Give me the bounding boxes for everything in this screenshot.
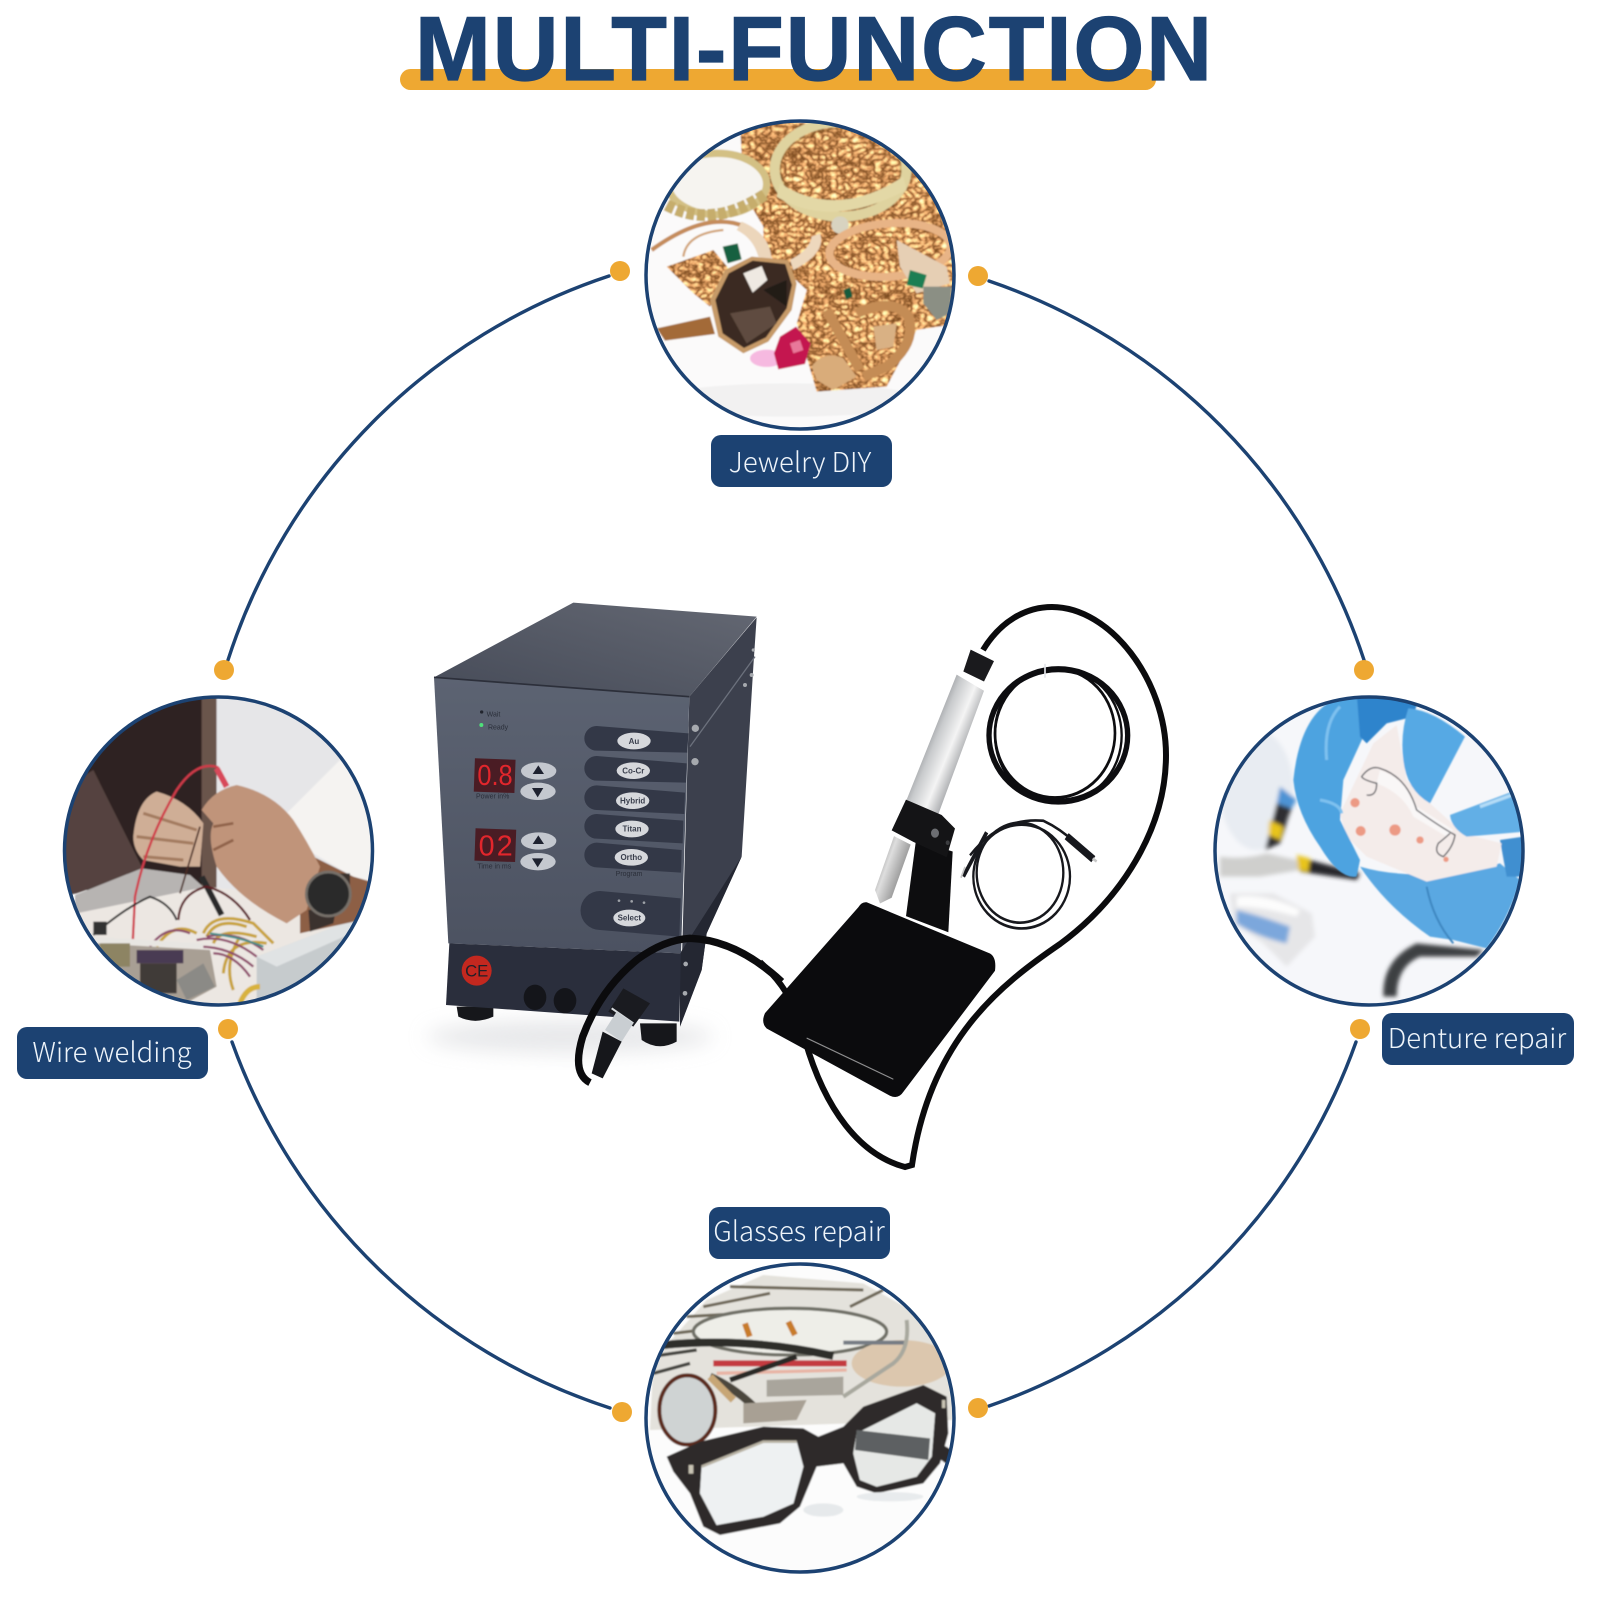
desk	[79, 886, 338, 1004]
panel: wire welding photo	[60, 690, 380, 1010]
forearm	[299, 857, 368, 934]
upper left glove	[1293, 693, 1367, 877]
pile of frames	[650, 1275, 953, 1430]
shirt	[288, 760, 370, 880]
select button: Select	[618, 914, 641, 923]
title underline	[400, 69, 1156, 90]
spot welder control box	[427, 603, 782, 1083]
power buttons	[520, 762, 556, 800]
status LEDs	[479, 710, 509, 731]
handpiece cable	[760, 607, 1166, 1167]
cable grip	[963, 650, 994, 682]
laptop	[60, 770, 143, 897]
program buttons: Ortho	[620, 853, 642, 862]
panel: denture photo	[1210, 690, 1530, 1010]
white strip	[130, 938, 204, 949]
time display: 02	[479, 830, 513, 862]
right side face	[680, 617, 757, 1027]
knobs	[524, 985, 576, 1013]
alligator test lead	[961, 820, 1097, 928]
program buttons: Hybrid	[620, 796, 645, 805]
power display	[474, 758, 516, 800]
top glove	[1357, 698, 1418, 744]
connector dots	[214, 261, 1374, 1422]
program buttons: Program	[616, 871, 643, 878]
cable coil	[989, 664, 1128, 803]
power display: 0.8	[477, 760, 513, 792]
pen tip	[875, 836, 911, 903]
grey case	[256, 936, 344, 998]
plaster	[1340, 725, 1502, 882]
thumb	[1450, 790, 1525, 837]
label: Wire welding: Wire welding	[32, 1030, 192, 1070]
pen barrel	[907, 675, 984, 817]
label: Wire welding	[17, 1027, 208, 1079]
program buttons: Titan	[623, 825, 642, 834]
probe and wires	[202, 877, 222, 915]
time display: Time in ms	[477, 863, 512, 870]
program buttons	[584, 726, 688, 878]
right oval ring	[828, 219, 952, 281]
panel: glasses photo	[650, 1274, 952, 1536]
red wire	[133, 766, 218, 943]
dark frame	[667, 1385, 948, 1535]
brown round frame	[659, 1375, 715, 1445]
label: Denture repair: Denture repair	[1388, 1016, 1566, 1056]
gold chain pile	[740, 120, 963, 392]
jewelry circle outline	[646, 121, 954, 429]
select button	[581, 891, 681, 937]
title	[400, 0, 1212, 100]
wire welding circle outline	[64, 697, 372, 1005]
label: Jewelry DIY	[711, 435, 892, 487]
clamp	[892, 800, 955, 857]
label: Glasses repair: Glasses repair	[713, 1209, 885, 1249]
lower band	[446, 943, 681, 1022]
circuit board	[98, 942, 218, 1001]
label: Jewelry DIY: Jewelry DIY	[729, 440, 872, 480]
right hand	[202, 785, 320, 923]
front cable and connector	[579, 938, 782, 1083]
time display	[474, 828, 516, 870]
wire clasp	[1377, 770, 1453, 837]
blurred tools	[1220, 730, 1483, 997]
connector ring	[228, 276, 1364, 1408]
program buttons: Au	[629, 737, 639, 746]
panel: jewelry photo	[650, 122, 952, 417]
left hand	[133, 792, 203, 867]
large top ring	[775, 122, 907, 217]
floor shadow	[427, 1020, 713, 1053]
handpiece on stand	[763, 650, 1128, 1097]
stand post	[906, 840, 953, 932]
smoky gem	[710, 257, 797, 353]
time buttons	[520, 832, 556, 870]
program buttons: Co-Cr	[622, 767, 644, 776]
base plate	[763, 902, 995, 1097]
status LEDs: Ready	[488, 724, 509, 731]
red marks	[1350, 798, 1449, 862]
feet	[457, 1007, 493, 1021]
denture circle outline	[1215, 697, 1523, 1005]
pink gem	[750, 350, 783, 367]
left greek ring	[668, 153, 767, 215]
gold buckle	[827, 306, 910, 377]
front panel	[434, 677, 689, 953]
ce mark	[462, 956, 492, 986]
glasses circle outline	[646, 1264, 954, 1572]
watch	[308, 909, 335, 932]
index finger	[1402, 708, 1465, 803]
title text: MULTI-FUNCTION	[415, 0, 1212, 100]
status LEDs: Wait	[487, 712, 500, 719]
lower glove	[1360, 863, 1520, 948]
ce mark: CE	[465, 962, 488, 981]
power display: Power in%	[476, 793, 509, 800]
left ring bands	[650, 218, 742, 252]
top face	[434, 603, 757, 697]
